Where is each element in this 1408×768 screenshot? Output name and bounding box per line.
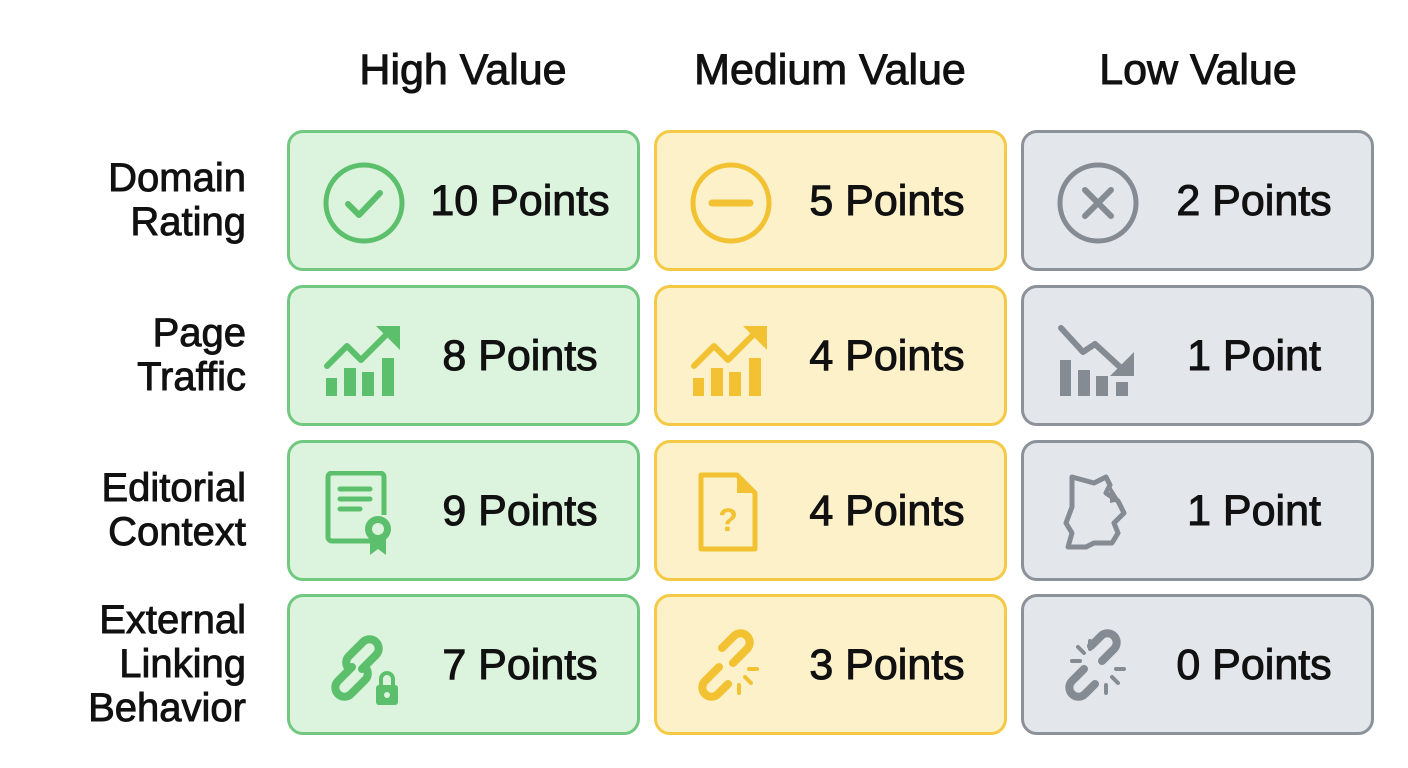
row label: Page Traffic: Page (153, 311, 246, 355)
cell: domain high (287, 130, 640, 271)
row label: Editorial Context: Context (108, 510, 246, 554)
row label: External Linking Behavior (88, 598, 246, 730)
icon: chart down (1058, 325, 1134, 396)
row label: External Linking Behavior: Behavior (88, 686, 246, 730)
cell: editorial medium (654, 440, 1007, 581)
icon: x circle (1058, 162, 1138, 244)
text: 1 Point (1187, 487, 1321, 535)
icon: chart up (691, 326, 767, 396)
icon: minus circle (690, 162, 772, 244)
row label: Domain Rating: Domain (108, 156, 246, 200)
icon: broken chain (698, 629, 759, 701)
icon: certificate (326, 471, 391, 555)
cell: editorial low (1021, 440, 1374, 581)
icon: chart up (324, 326, 400, 396)
text: 3 Points (809, 641, 965, 689)
cell: editorial high (287, 440, 640, 581)
cell: traffic high (287, 285, 640, 426)
cell: domain low (1021, 130, 1374, 271)
cell: domain medium (654, 130, 1007, 271)
row label: Domain Rating (108, 156, 246, 244)
row label: Editorial Context: Editorial (101, 466, 246, 510)
cell: traffic low (1021, 285, 1374, 426)
header: Low Value: Low Value (1099, 46, 1297, 94)
cell: linking low (1021, 594, 1374, 735)
text: 5 Points (809, 177, 965, 225)
text: 7 Points (442, 641, 598, 689)
icon: document question: ? (718, 502, 738, 538)
cell: traffic medium (654, 285, 1007, 426)
row label: External Linking Behavior: Linking (119, 642, 246, 686)
text: 9 Points (442, 487, 598, 535)
icon: chain lock (331, 635, 398, 705)
icon: document question (698, 472, 758, 552)
header: Medium Value: Medium Value (694, 46, 966, 94)
text: 10 Points (430, 177, 610, 225)
text: 8 Points (442, 332, 598, 380)
text: 1 Point (1187, 332, 1321, 380)
text: 4 Points (809, 332, 965, 380)
row label: External Linking Behavior: External (99, 598, 246, 642)
icon: torn paper (1064, 474, 1126, 550)
icon: check circle (324, 162, 404, 244)
row label: Page Traffic: Traffic (137, 355, 246, 399)
row label: Editorial Context (101, 466, 246, 554)
cell: linking high (287, 594, 640, 735)
row label: Page Traffic (137, 311, 246, 399)
text: 0 Points (1176, 641, 1332, 689)
icon: broken chain (1065, 629, 1126, 701)
text: 2 Points (1176, 177, 1332, 225)
text: 4 Points (809, 487, 965, 535)
header: High Value: High Value (359, 46, 567, 94)
cell: linking medium (654, 594, 1007, 735)
row label: Domain Rating: Rating (130, 200, 246, 244)
